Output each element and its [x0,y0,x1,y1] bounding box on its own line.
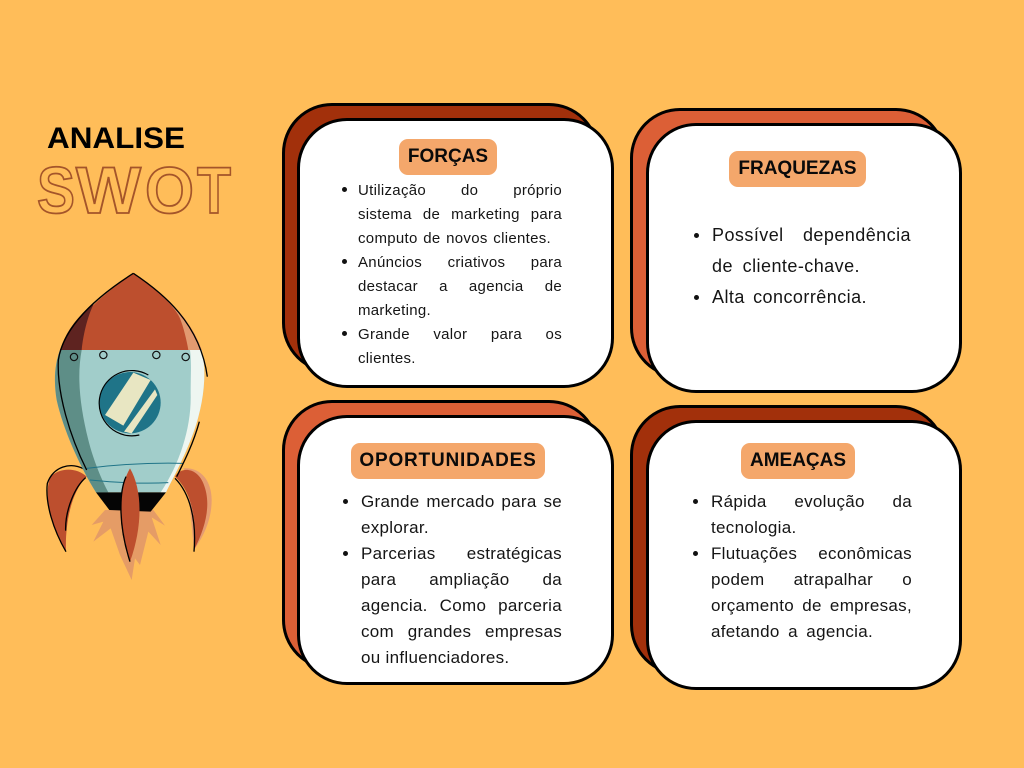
text block: oportunidades list: Parcerias estratégicas [361,544,562,563]
text block: oportunidades list: explorar. [361,518,429,537]
rivets [70,351,189,361]
rocket base [96,492,166,512]
text block: ameacas list: tecnologia. [711,518,797,537]
text block: ameacas list: Rápida evolução da [711,492,912,511]
heading: fraquezas [729,151,866,187]
nose cone [60,273,202,350]
text block: ameacas list: afetando a agencia. [711,622,873,641]
heading: ameacas: AMEAÇAS [750,450,846,471]
heading: ameacas [741,443,855,479]
left fin [47,466,87,552]
text block: forcas list: sistema de marketing para [358,206,562,223]
rocket outline strokes [58,273,207,562]
text block: forcas list: marketing. [358,302,431,319]
text block: fraquezas list: de cliente-chave. [712,256,860,276]
text block: fraquezas list: Possível dependência [712,225,911,245]
rocket body [55,350,204,492]
text block: oportunidades list: Grande mercado para se [361,492,562,511]
text block: oportunidades list: ou influenciadores. [361,648,509,667]
panel front card [297,118,614,388]
heading: forcas: FORÇAS [408,146,488,167]
heading: forcas [399,139,497,175]
panel back layer [282,400,599,670]
panel front card [646,420,962,690]
panel front card [646,123,962,393]
text block: ameacas list: podem atrapalhar o [711,570,912,589]
panel back layer [282,103,599,373]
panel front card [297,415,614,685]
text block: ameacas list: orçamento de empresas, [711,596,912,615]
text block: forcas list: destacar a agencia de [358,278,562,295]
right fin [175,468,212,552]
text block: oportunidades list: com grandes empresas [361,622,562,641]
text block: oportunidades list: para ampliação da [361,570,562,589]
title: Analise SWOT [37,122,232,223]
text block: ameacas list: Flutuações econômicas [711,544,912,563]
text block: forcas list: Anúncios criativos para [358,254,562,271]
heading: SWOT outlined [37,153,231,227]
heading: oportunidades: OPORTUNIDADES [359,450,537,471]
text block: fraquezas list: Alta concorrência. [712,287,867,307]
text block: oportunidades list: agencia. Como parceria [361,596,562,615]
porthole window [99,371,161,436]
text block: forcas list: clientes. [358,350,416,367]
heading: oportunidades [351,443,545,479]
center fin [120,468,140,562]
text block: forcas list: computo de novos clientes. [358,230,551,247]
panel back layer [630,405,946,675]
heading: Analise: ANALISE [47,122,185,155]
panel back layer [630,108,946,378]
icon: rocket illustration [46,272,212,580]
text block: forcas list: Grande valor para os [358,326,562,343]
text block: forcas list: Utilização do próprio [358,182,562,199]
flames [92,510,165,580]
heading: fraquezas: FRAQUEZAS [738,158,857,179]
